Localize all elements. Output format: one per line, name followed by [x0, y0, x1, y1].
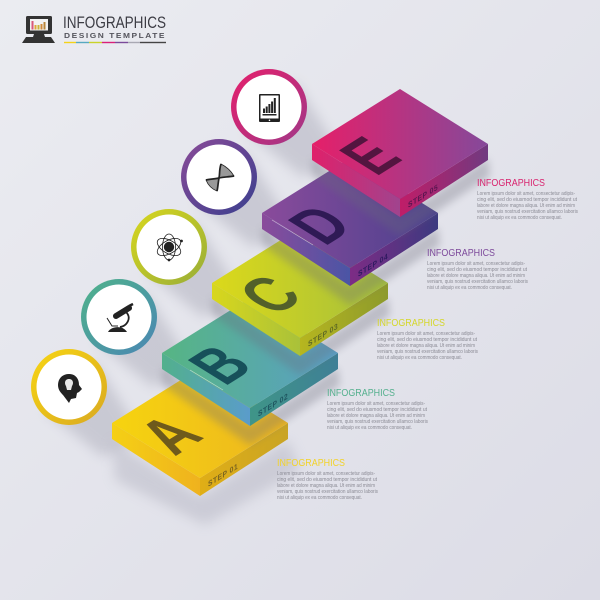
- right side: [300, 283, 388, 356]
- text block 04: cing elit, sed do eiusmod tempor incididunt ut: [427, 267, 528, 273]
- step 02: B: [162, 298, 340, 445]
- text block 05: nisi ut aliquip ex ea commodo consequat.: [477, 215, 562, 221]
- icon: head: [58, 374, 82, 403]
- circle C: atom: [131, 209, 243, 317]
- text block 05: [477, 178, 578, 221]
- letter E: E: [324, 127, 417, 185]
- step label: STEP 01: [208, 461, 238, 489]
- text block 03: [377, 318, 478, 361]
- text block 05: labore et dolore magna aliqua. Ut enim ad minim: [477, 203, 575, 209]
- letter C: C: [222, 265, 318, 324]
- icon: atom: [154, 234, 184, 261]
- circle E: tablet with chart: [231, 69, 343, 177]
- text block 01: INFOGRAPHICS: [277, 458, 345, 469]
- circle icons column: [31, 69, 343, 457]
- right side: [250, 353, 338, 426]
- top face: [162, 298, 338, 408]
- step 05: E: [312, 89, 490, 236]
- step 01: A: [112, 368, 300, 525]
- left side: [262, 213, 350, 286]
- top face: [112, 368, 288, 478]
- header: logo and title: [22, 13, 166, 43]
- step 04: D: [262, 158, 440, 305]
- text block 04: INFOGRAPHICS: [427, 248, 495, 259]
- colour strip: [64, 42, 166, 43]
- icon: monitor with bar chart: [22, 16, 55, 43]
- circle D: DNA helix: [181, 139, 293, 247]
- text block 04: veniam, quis nostrud exercitation ullamco laboris: [427, 279, 528, 285]
- step label: STEP 02: [258, 391, 288, 419]
- letter D: D: [272, 195, 368, 254]
- step 03: C: [212, 228, 390, 375]
- text block 01: Lorem ipsum dolor sit amet, consectetur adipis-: [277, 471, 375, 477]
- text block 05: INFOGRAPHICS: [477, 178, 545, 189]
- step label: STEP 04: [358, 251, 388, 279]
- step label: STEP 05: [408, 182, 438, 210]
- text block 03: Lorem ipsum dolor sit amet, consectetur adipis-: [377, 331, 475, 337]
- left side: [112, 423, 200, 496]
- text block 01: veniam, quis nostrud exercitation ullamco laboris: [277, 489, 378, 495]
- circle A: head with light bulb: [31, 349, 143, 457]
- icon: DNA: [206, 164, 234, 191]
- subtitle text: DESIGN TEMPLATE: [64, 31, 166, 40]
- text block 02: labore et dolore magna aliqua. Ut enim ad minim: [327, 413, 425, 419]
- right side: [200, 423, 288, 496]
- circle B: microscope: [81, 279, 193, 387]
- text block 01: nisi ut aliquip ex ea commodo consequat.: [277, 495, 362, 501]
- text block 03: INFOGRAPHICS: [377, 318, 445, 329]
- title text: INFOGRAPHICS: [63, 13, 166, 32]
- letter B: B: [172, 335, 268, 394]
- left side: [312, 144, 400, 217]
- text block 02: cing elit, sed do eiusmod tempor incididunt ut: [327, 407, 428, 413]
- text block 02: nisi ut aliquip ex ea commodo consequat.: [327, 425, 412, 431]
- text block 02: [327, 388, 428, 431]
- right side: [350, 213, 438, 286]
- letter A: A: [122, 405, 218, 464]
- text block 03: veniam, quis nostrud exercitation ullamco laboris: [377, 349, 478, 355]
- text block 02: INFOGRAPHICS: [327, 388, 395, 399]
- icon: tablet: [259, 94, 280, 122]
- text block 05: veniam, quis nostrud exercitation ullamco laboris: [477, 209, 578, 215]
- text block 02: veniam, quis nostrud exercitation ullamco laboris: [327, 419, 428, 425]
- top face: [312, 89, 488, 199]
- step label: STEP 03: [308, 321, 338, 349]
- top face: [262, 158, 438, 268]
- text block 02: Lorem ipsum dolor sit amet, consectetur adipis-: [327, 401, 425, 407]
- icon: microscope: [107, 304, 133, 332]
- text block 01: labore et dolore magna aliqua. Ut enim ad minim: [277, 483, 375, 489]
- text block 04: Lorem ipsum dolor sit amet, consectetur adipis-: [427, 261, 525, 267]
- text block 05: Lorem ipsum dolor sit amet, consectetur adipis-: [477, 191, 575, 197]
- text block 04: [427, 248, 528, 291]
- text block 01: [277, 458, 378, 501]
- text block 04: nisi ut aliquip ex ea commodo consequat.: [427, 285, 512, 291]
- right side: [400, 144, 488, 217]
- text block 03: cing elit, sed do eiusmod tempor incididunt ut: [377, 337, 478, 343]
- left side: [212, 283, 300, 356]
- text block 03: nisi ut aliquip ex ea commodo consequat.: [377, 355, 462, 361]
- left side: [162, 353, 250, 426]
- text block 03: labore et dolore magna aliqua. Ut enim ad minim: [377, 343, 475, 349]
- text block 01: cing elit, sed do eiusmod tempor incididunt ut: [277, 477, 378, 483]
- text block 04: labore et dolore magna aliqua. Ut enim ad minim: [427, 273, 525, 279]
- text block 05: cing elit, sed do eiusmod tempor incididunt ut: [477, 197, 578, 203]
- top face: [212, 228, 388, 338]
